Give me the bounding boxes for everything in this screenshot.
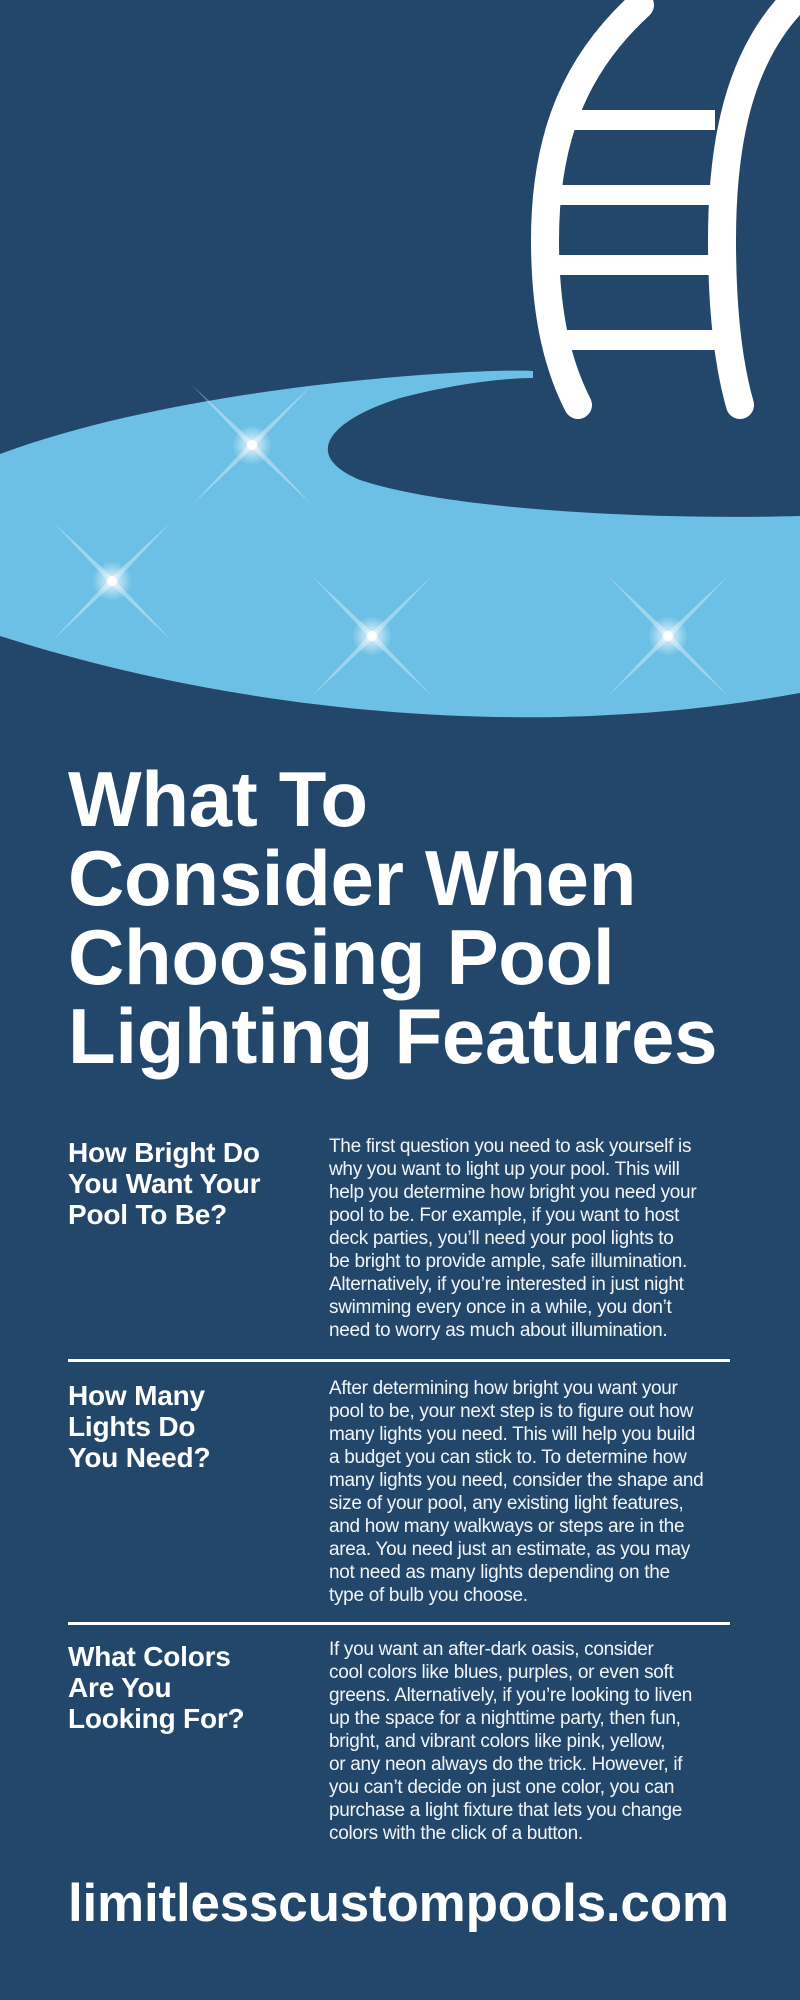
section 1 body: deck parties, you’ll need your pool lights to (329, 1228, 674, 1249)
section 3 body: up the space for a nighttime party, then fun, (329, 1708, 681, 1729)
section 2 heading: How Many (68, 1380, 205, 1411)
title: Choosing Pool (68, 913, 614, 1001)
section 3 heading: What Colors (68, 1641, 231, 1672)
icon: sparkles (52, 385, 728, 696)
section 1 heading: Pool To Be? (68, 1199, 227, 1230)
title (68, 755, 717, 1080)
section 3 body (329, 1639, 692, 1844)
section 1 body: why you want to light up your pool. This will (329, 1159, 680, 1180)
section 2 body: area. You need just an estimate, as you may (329, 1539, 690, 1560)
section 2 body: and how many walkways or steps are in the (329, 1516, 684, 1537)
section 1 body: The first question you need to ask yourself is (329, 1136, 691, 1157)
section 3 body: If you want an after-dark oasis, consider (329, 1639, 654, 1660)
title: Consider When (68, 834, 636, 922)
section 3 body: or any neon always do the trick. However, if (329, 1754, 682, 1775)
section 1 heading: You Want Your (68, 1168, 260, 1199)
section 1 body: need to worry as much about illumination. (329, 1320, 667, 1341)
pool shape (0, 371, 800, 717)
section 2 body: many lights you need. This will help you build (329, 1424, 695, 1445)
section 3 body: bright, and vibrant colors like pink, yellow, (329, 1731, 665, 1752)
section 1 heading (68, 1137, 260, 1230)
section 3 body: purchase a light fixture that lets you change (329, 1800, 682, 1821)
section 3 heading: Looking For? (68, 1703, 244, 1734)
title: What To (68, 755, 368, 843)
section 1 body: pool to be. For example, if you want to host (329, 1205, 679, 1226)
section 2 body: type of bulb you choose. (329, 1585, 528, 1606)
section 2 body: a budget you can stick to. To determine how (329, 1447, 686, 1468)
section 1 body: help you determine how bright you need your (329, 1182, 696, 1203)
section 1 heading: How Bright Do (68, 1137, 260, 1168)
illustration: pool with ladder and sparkles (0, 0, 800, 718)
section 2 heading (68, 1380, 210, 1473)
section 1 body: swimming every once in a while, you don’t (329, 1297, 672, 1318)
section 1 body: Alternatively, if you’re interested in just night (329, 1274, 684, 1295)
section 1 body (329, 1136, 696, 1341)
section 2 body: After determining how bright you want your (329, 1378, 678, 1399)
section 3 body: colors with the click of a button. (329, 1823, 583, 1844)
section 2 heading: Lights Do (68, 1411, 195, 1442)
footer url: limitlesscustompools.com (68, 1874, 729, 1933)
section 2 body: not need as many lights depending on the (329, 1562, 670, 1583)
icon: pool ladder (545, 5, 790, 405)
title: Lighting Features (68, 992, 717, 1080)
section 1 body: be bright to provide ample, safe illumination. (329, 1251, 687, 1272)
section 3 body: you can’t decide on just one color, you can (329, 1777, 674, 1798)
section 2 heading: You Need? (68, 1442, 210, 1473)
section 3 heading (68, 1641, 244, 1734)
section 3 body: greens. Alternatively, if you’re looking to liven (329, 1685, 692, 1706)
section 3 body: cool colors like blues, purples, or even soft (329, 1662, 674, 1683)
section 3 heading: Are You (68, 1672, 171, 1703)
section 2 body: many lights you need, consider the shape and (329, 1470, 703, 1491)
section 2 body: size of your pool, any existing light features, (329, 1493, 684, 1514)
section 2 body: pool to be, your next step is to figure out how (329, 1401, 693, 1422)
section 2 body (329, 1378, 703, 1606)
